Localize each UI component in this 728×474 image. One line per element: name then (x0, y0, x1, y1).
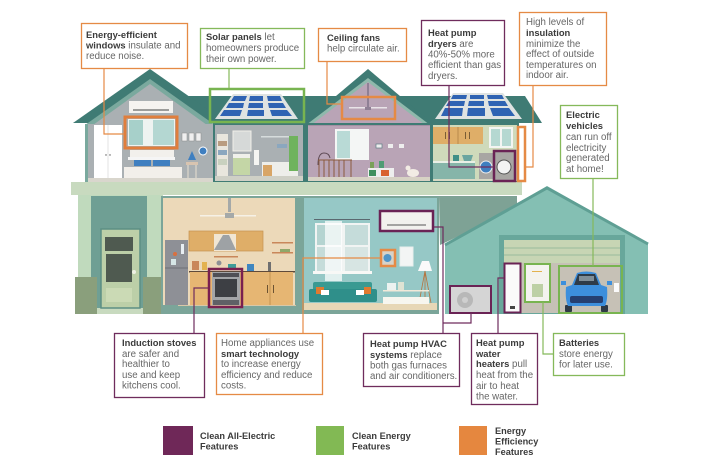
legend: clean energy: Clean Energy (352, 431, 412, 441)
callout: batteries: store energy (559, 349, 613, 360)
legend: energy efficiency: Features (495, 447, 533, 457)
windows highlight (104, 69, 177, 148)
stove (212, 272, 240, 305)
callout: ceiling fans: Ceiling fans (327, 32, 380, 43)
callout: electric vehicles: generated (566, 153, 610, 164)
callout: heat pump HVAC (364, 334, 460, 386)
callout: induction stoves: healthier to (122, 359, 170, 370)
water heater (505, 264, 520, 312)
callout: ceiling fans (318, 28, 406, 62)
callout: solar panels (200, 28, 304, 68)
electric car (561, 272, 619, 312)
electric vehicle highlight (559, 178, 622, 313)
callout: induction stoves (114, 334, 204, 398)
solar panels: left roof (215, 94, 298, 119)
callout: heat pump water heaters: air to heat (476, 381, 519, 392)
callout: electric vehicles: at home! (566, 164, 604, 175)
callout: electric vehicles: Electric (566, 109, 600, 120)
left gable (73, 69, 227, 183)
callout: heat pump water heaters: heaters pull (476, 358, 527, 370)
callout: heat pump dryers: efficient than gas (428, 60, 501, 71)
outdoor unit highlight (443, 286, 491, 323)
callout: heat pump HVAC: systems replace (370, 349, 442, 361)
illustration: house cross-section (71, 69, 648, 314)
callout: heat pump dryers: dryers are (428, 38, 473, 50)
callout: insulation: insulation (526, 27, 571, 38)
water heater highlight (498, 264, 520, 333)
middle gable: nursery (304, 69, 432, 183)
callout: induction stoves: are safer and (122, 349, 179, 360)
front entry (75, 195, 163, 314)
legend: clean all-electric (163, 426, 275, 455)
stove highlight (194, 269, 242, 333)
callout: energy-efficient windows: Energy-efficient (86, 29, 157, 40)
indoor unit highlight (380, 211, 443, 333)
legend: clean all-electric: Features (200, 442, 238, 452)
insulation highlight (518, 86, 533, 181)
callout: insulation: minimize the (526, 39, 580, 50)
callout: energy-efficient windows: reduce noise. (86, 51, 144, 62)
callout: smart technology: to increase energy (221, 359, 301, 370)
solar highlight (210, 69, 304, 122)
callout: heat pump water heaters (472, 334, 538, 404)
callout: solar panels: homeowners produce (206, 43, 299, 54)
callout: heat pump water heaters: water (475, 348, 501, 359)
callout: insulation: temperatures on (526, 60, 597, 71)
callout: heat pump water heaters: heat from the (476, 370, 533, 381)
batteries highlight (525, 264, 553, 354)
laundry room (430, 123, 519, 183)
callout: insulation (520, 12, 606, 86)
callout: insulation: indoor air. (526, 70, 569, 81)
callout: induction stoves: use and keep (122, 370, 180, 381)
callout: electric vehicles (560, 106, 618, 178)
feature highlight outlines and leader lines (104, 62, 622, 354)
roof band (73, 96, 542, 123)
legend: energy efficiency: Energy (495, 426, 527, 436)
ceiling fan highlight (327, 62, 395, 119)
callout: heat pump water heaters: the water. (476, 392, 518, 402)
floor band (71, 182, 522, 195)
legend: clean energy (316, 426, 412, 455)
living room (297, 196, 439, 314)
callout: heat pump dryers: dryers. (428, 71, 458, 82)
callout: batteries (554, 334, 624, 376)
bedroom furniture (88, 101, 213, 182)
legend: energy efficiency (459, 426, 539, 457)
callout: smart technology: smart technology (221, 348, 300, 359)
callout: batteries: Batteries (559, 337, 599, 348)
callout: smart technology (216, 334, 322, 394)
callout: energy-efficient windows: windows insulate and (85, 40, 181, 52)
callout: solar panels: their own power. (206, 54, 277, 65)
callout: heat pump HVAC: both gas furnaces (370, 360, 447, 372)
callout: heat pump water heaters: Heat pump (476, 337, 525, 348)
callout: heat pump HVAC: and air conditioners. (370, 371, 457, 382)
callout: heat pump dryers (422, 20, 504, 86)
callout: heat pump HVAC: Heat pump HVAC (370, 338, 447, 349)
callout: electric vehicles: can run off (566, 132, 612, 143)
callout: induction stoves: kitchens cool. (122, 380, 181, 392)
home battery (526, 265, 549, 301)
callout: smart technology: Home appliances use (221, 338, 314, 349)
legend: energy efficiency: Efficiency (495, 436, 539, 446)
dryer highlight (449, 86, 515, 181)
thermostat highlight (303, 250, 395, 333)
legend: clean energy: Features (352, 442, 390, 452)
callout: energy-efficient windows (82, 24, 188, 68)
callout: smart technology: efficiency and reduce (221, 370, 312, 381)
callout: heat pump dryers: Heat pump (428, 27, 477, 38)
solar panels: right roof (435, 93, 522, 119)
lower storey shadow (439, 196, 517, 245)
legend: clean all-electric: Clean All-Electric (200, 431, 275, 441)
callout: insulation: High levels of (526, 17, 584, 28)
bathroom (213, 123, 304, 183)
callout: ceiling fans: help circulate air. (327, 44, 400, 54)
garage (445, 186, 648, 314)
callout: smart technology: costs. (221, 380, 246, 392)
callout: induction stoves: Induction stoves (122, 337, 196, 348)
callout: electric vehicles: electricity (566, 143, 607, 154)
callout: electric vehicles: vehicles (566, 120, 603, 131)
callout: solar panels: Solar panels let (206, 31, 275, 43)
kitchen (161, 196, 297, 314)
callout: insulation: effect of outside (526, 49, 594, 60)
callout: heat pump dryers: 40%-50% more (428, 50, 495, 60)
heat pump outdoor unit (451, 287, 491, 312)
callout: batteries: for later use. (559, 360, 613, 370)
legend (163, 426, 539, 457)
thermostat (382, 251, 394, 265)
